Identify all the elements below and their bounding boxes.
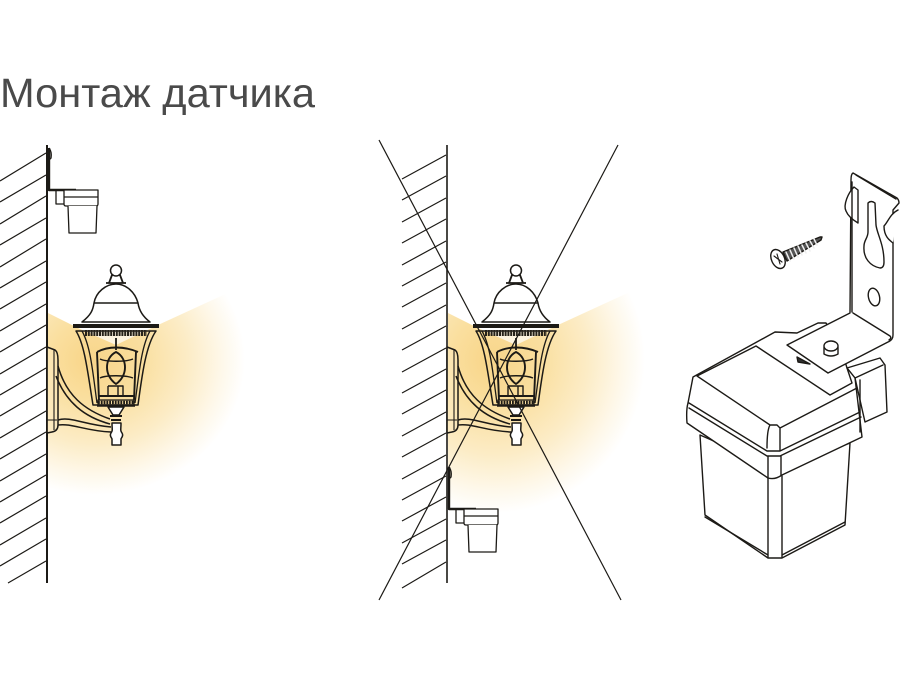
lamp on wall <box>447 265 559 445</box>
lamp on wall <box>47 265 159 445</box>
panel: sensor and bracket detail <box>687 173 899 558</box>
mounting bracket <box>787 173 899 373</box>
panel: sensor mounted above the lamp <box>0 145 245 583</box>
wall with hatching <box>0 145 47 583</box>
icon: screw <box>768 237 822 271</box>
panel: sensor mounted below the lamp with forbidden zone <box>379 140 645 600</box>
light sensor body <box>687 323 887 558</box>
title: Монтаж датчика <box>0 70 315 116</box>
wall with hatching <box>402 145 447 588</box>
light glow <box>48 285 245 520</box>
light glow <box>448 285 645 525</box>
sensor field-of-view lines <box>379 140 621 600</box>
sensor on bracket <box>49 148 98 233</box>
sensor below lamp <box>449 467 498 552</box>
